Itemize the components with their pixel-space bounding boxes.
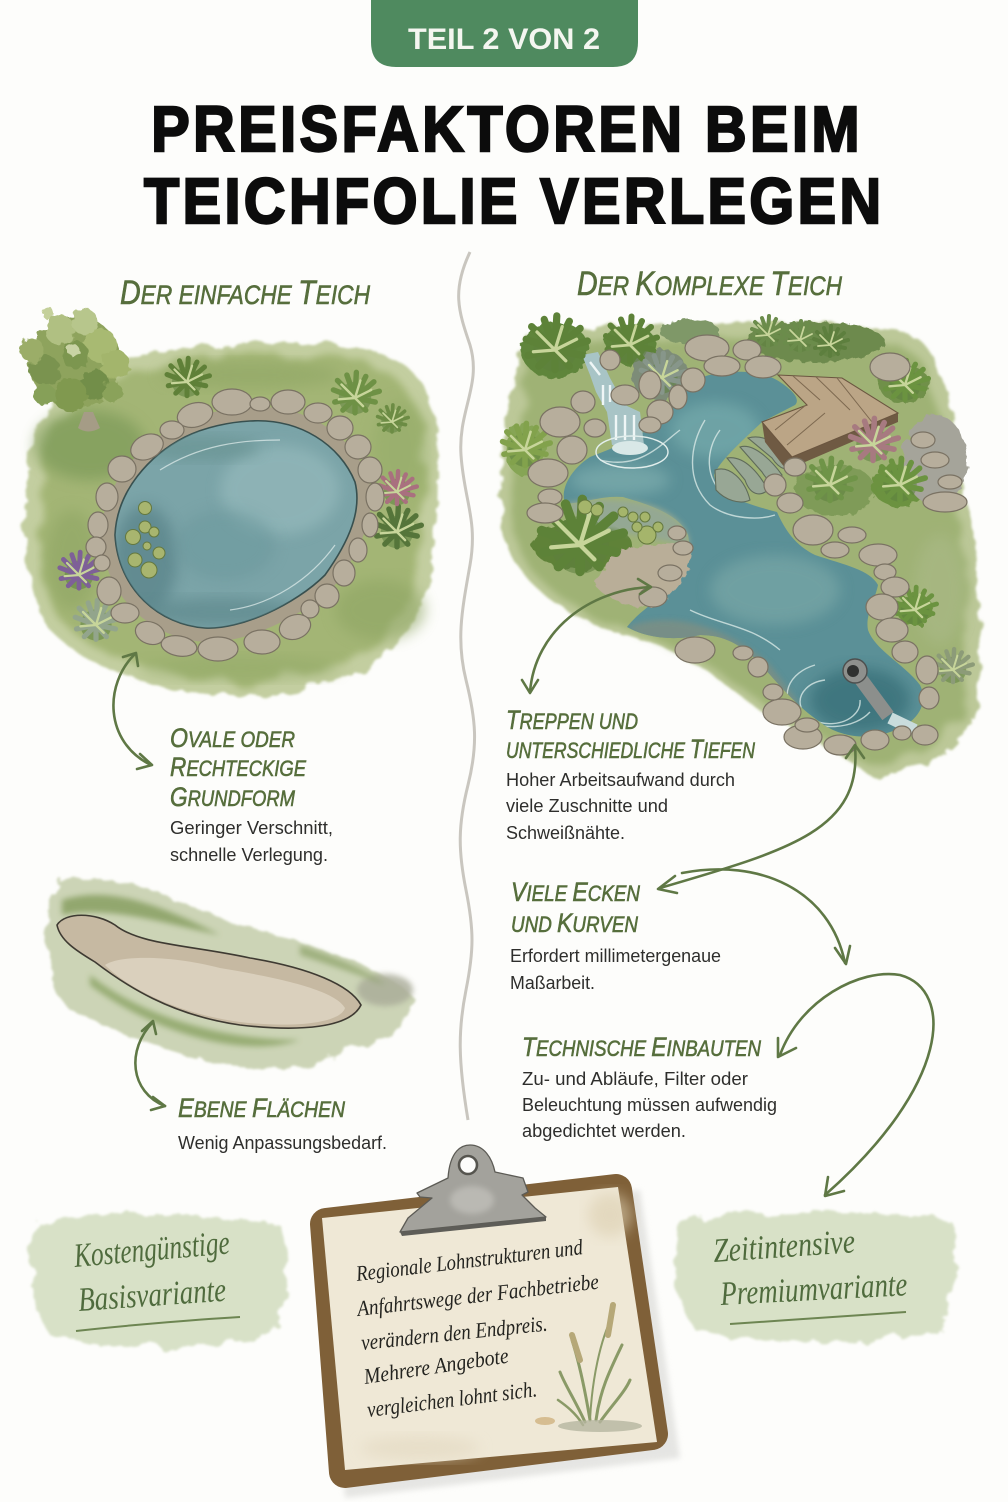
text block: Technische Einbauten: TECHNISCHE EINBAUTEN xyxy=(522,1032,761,1062)
wooden deck xyxy=(762,375,898,468)
note text: Regionale Lohnstrukturen und xyxy=(354,1234,585,1286)
text block: Viele Ecken und Kurven: UND KURVEN xyxy=(511,908,638,938)
text block: Treppen und unterschiedliche Tiefen: TREPPEN UND xyxy=(506,705,638,735)
text block: Viele Ecken und Kurven xyxy=(510,877,721,993)
callout: Kostengünstige Basisvariante xyxy=(32,1213,289,1347)
divider: wavy line between columns xyxy=(459,252,475,1120)
heading: simple pond: DER EINFACHE TEICH xyxy=(120,274,370,312)
badge: Teil 2 von 2: TEIL 2 VON 2 xyxy=(408,23,600,56)
text block: Viele Ecken und Kurven: Erfordert millimetergenaue xyxy=(510,945,721,966)
text block: Ovale oder rechteckige Grundform: OVALE ODER xyxy=(170,723,295,753)
excavated outer shape xyxy=(57,915,361,1028)
text block: Technische Einbauten xyxy=(522,1032,777,1141)
illustration: complex pond xyxy=(501,316,979,780)
illustration: flat excavated area xyxy=(47,877,416,1072)
gravel ring xyxy=(115,421,357,628)
board xyxy=(326,1190,652,1472)
callout: Zeitintensive Premiumvariante: Zeitintensive xyxy=(712,1223,856,1270)
text block: Technische Einbauten: Beleuchtung müssen aufwendig xyxy=(522,1094,777,1115)
text block: Viele Ecken und Kurven: VIELE ECKEN xyxy=(511,877,640,907)
text block: Treppen und unterschiedliche Tiefen: Schweißnähte. xyxy=(506,822,625,843)
callout: Zeitintensive Premiumvariante xyxy=(674,1211,957,1342)
waterfall xyxy=(582,352,668,468)
text block: Ebene Flächen: EBENE FLÄCHEN xyxy=(178,1093,345,1123)
text block: Treppen und unterschiedliche Tiefen: viele Zuschnitte und xyxy=(506,795,668,816)
stones xyxy=(86,389,384,661)
metal clip xyxy=(400,1145,546,1236)
text block: Ovale oder rechteckige Grundform: schnelle Verlegung. xyxy=(170,844,328,865)
text block: Technische Einbauten: Zu- und Abläufe, Filter oder xyxy=(522,1068,748,1089)
plants xyxy=(526,316,587,372)
water xyxy=(113,421,357,628)
text block: Ovale oder rechteckige Grundform: GRUNDFORM xyxy=(170,782,296,812)
text block: Ovale oder rechteckige Grundform: RECHTECKIGE xyxy=(170,752,306,782)
text block: Ovale oder rechteckige Grundform: Geringer Verschnitt, xyxy=(170,817,333,838)
tree xyxy=(20,307,130,432)
lily pads xyxy=(126,502,165,578)
note text: Anfahrtswege der Fachbetriebe xyxy=(354,1269,600,1321)
foliage bushes xyxy=(505,320,967,626)
heading: complex pond: DER KOMPLEXE TEICH xyxy=(577,265,842,303)
arrow: simple pond to Ovale xyxy=(113,653,152,769)
water xyxy=(564,372,923,737)
text block: Ebene Flächen: Wenig Anpassungsbedarf. xyxy=(178,1132,387,1153)
title xyxy=(144,93,881,237)
grass xyxy=(501,323,979,780)
arrow: complex pond to Treppen xyxy=(522,579,651,693)
text block: Viele Ecken und Kurven: Maßarbeit. xyxy=(510,972,595,993)
illustration: simple pond xyxy=(20,307,438,696)
paper xyxy=(322,1187,657,1470)
grass xyxy=(25,343,438,696)
grass and soil xyxy=(47,877,416,1072)
text block: Ovale oder rechteckige Grundform xyxy=(170,723,333,865)
arrow: Viele Ecken to Technische Einbauten xyxy=(682,869,850,964)
plants xyxy=(167,358,210,397)
note text: Mehrere Angebote xyxy=(361,1343,510,1389)
lily pads xyxy=(578,500,663,544)
clipboard xyxy=(322,1145,680,1498)
text block: Treppen und unterschiedliche Tiefen: UNTERSCHIEDLICHE TIEFEN xyxy=(506,734,755,764)
note text: vergleichen lohnt sich. xyxy=(366,1376,538,1422)
note text xyxy=(354,1234,600,1422)
stones xyxy=(527,335,967,755)
callout: Zeitintensive Premiumvariante: Premiumvariante xyxy=(719,1266,908,1313)
title: PREISFAKTOREN BEIM xyxy=(151,93,860,165)
reed plant xyxy=(535,1305,642,1432)
shadow xyxy=(322,1190,680,1498)
text block: Technische Einbauten: abgedichtet werden. xyxy=(522,1120,686,1141)
text block: Treppen und unterschiedliche Tiefen xyxy=(506,705,755,843)
callout: Kostengünstige Basisvariante: Basisvariante xyxy=(77,1272,227,1319)
arrow: flat area to Ebene Flächen xyxy=(135,1021,165,1110)
arrow: complex pond to Viele Ecken xyxy=(658,745,864,893)
excavated floor xyxy=(105,958,345,1025)
text block: Treppen und unterschiedliche Tiefen: Hoher Arbeitsaufwand durch xyxy=(506,769,735,790)
callout: Kostengünstige Basisvariante: Kostengünstige xyxy=(72,1225,231,1275)
note text: verändern den Endpreis. xyxy=(360,1311,548,1355)
stone steps xyxy=(715,437,795,502)
pipe xyxy=(843,659,915,730)
shallow shelf with gravel xyxy=(567,500,692,607)
title: TEICHFOLIE VERLEGEN xyxy=(144,165,881,237)
text block: Ebene Flächen xyxy=(178,1093,387,1153)
arrow: big loop from Technische Einbauten to premium variant xyxy=(778,974,933,1196)
badge: Teil 2 von 2 xyxy=(371,0,638,67)
